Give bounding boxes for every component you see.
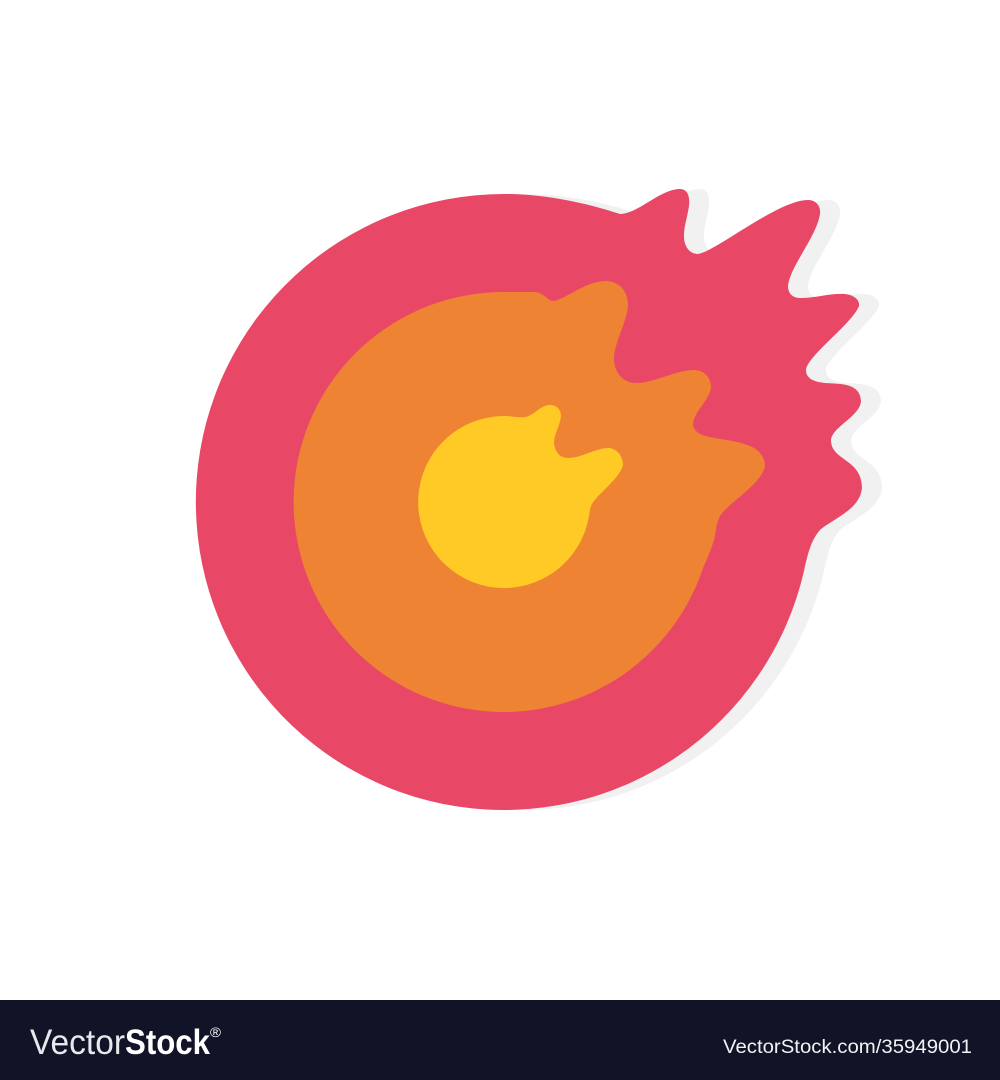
footer image id: VectorStock.com/35949001 [723, 1036, 972, 1058]
middle orange flame [294, 281, 765, 712]
inner yellow flame [418, 405, 623, 588]
icon: flame ball [196, 189, 882, 810]
outer red flame [196, 189, 862, 810]
footer logo: ® [210, 1024, 222, 1040]
footer bar [0, 1000, 1000, 1080]
footer logo: Stock [125, 1023, 210, 1062]
footer logo [30, 1023, 222, 1062]
shadow of flame ball [216, 189, 882, 810]
footer logo: Vector [30, 1023, 125, 1062]
